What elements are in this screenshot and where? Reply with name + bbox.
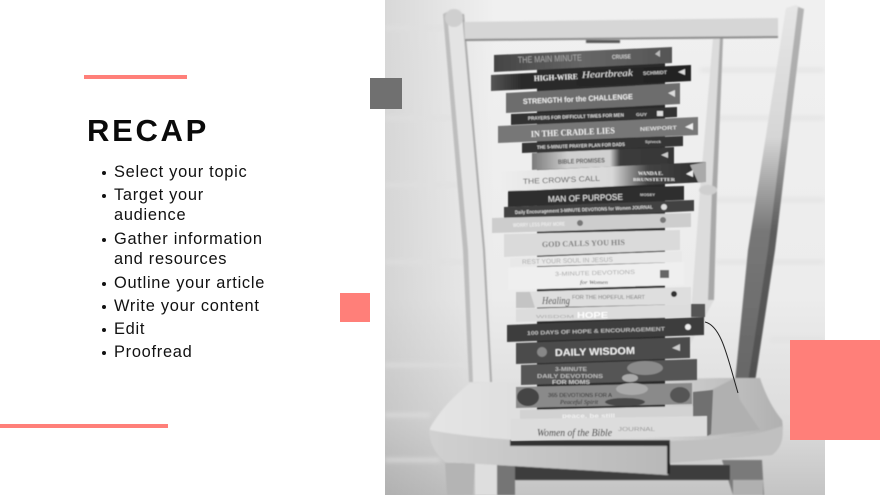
book: Worry Less Pray More: WORRY LESS PRAY MORE	[513, 222, 565, 229]
chair legs	[445, 460, 764, 495]
book: Bible Promises: BIBLE PROMISES	[558, 157, 606, 166]
book: Hope: WISDOM	[536, 314, 574, 319]
book: 3-Minute Devotions for Women: for Women	[580, 279, 608, 286]
small pink square	[340, 293, 370, 322]
book: High-Wire Heartbreak: HIGH-WIRE	[534, 72, 578, 83]
book: Women of the Bible Journal: JOURNAL	[618, 427, 655, 433]
book: The Crow's Call: THE CROW'S CALL	[523, 174, 600, 186]
book: Hope	[516, 304, 705, 322]
book: In the Cradle Lies	[498, 117, 698, 143]
book: Man of Purpose: MOSEY	[640, 192, 655, 197]
book: High-Wire Heartbreak: SCHMIDT	[643, 70, 667, 77]
bullet list	[102, 163, 265, 361]
book: The Main Minute: CRUISE	[612, 54, 631, 61]
book: Daily Wisdom	[516, 337, 690, 364]
book: Worry Less Pray More	[492, 213, 691, 233]
bullet list: and resources	[114, 250, 227, 268]
book: Strength for the Challenge	[506, 83, 680, 113]
book: 3-Minute Devotions for Women	[508, 262, 684, 290]
book: The 5-Minute Prayer Plan for Dads: Spiveck	[645, 139, 662, 144]
book: The 5-Minute Prayer Plan for Dads	[522, 136, 683, 153]
bullet list: Gather information	[114, 230, 263, 248]
book: The Crow's Call	[498, 162, 706, 192]
book: Healing for the Hopeful Heart: Healing	[541, 296, 570, 307]
book: Women of the Bible Journal	[511, 390, 713, 441]
bullet list: Write your content	[114, 297, 260, 315]
book: In the Cradle Lies: NEWPORT	[640, 125, 678, 133]
book: 3-Minute Daily Devotions for Moms: 3-MINUTE	[555, 367, 588, 373]
book: Bible Promises	[532, 147, 674, 170]
book: God Calls You His	[504, 230, 680, 257]
accent bar: bottom	[0, 424, 168, 428]
book: Peace, Be Still: peace, be still	[562, 413, 615, 420]
title: RECAP	[87, 113, 209, 148]
book: God Calls You His: GOD CALLS YOU HIS	[542, 238, 626, 249]
book: Prayers for Difficult Times for Men: GUY	[636, 112, 647, 117]
book: 365 Devotions for a Peaceful Spirit: 365 DEVOTIONS FOR A	[548, 393, 612, 399]
wall	[385, 0, 825, 495]
ribbon bookmark	[705, 322, 738, 393]
book: 100 Days of Hope and Encouragement: 100 DAYS OF HOPE & ENCOURAGEMENT	[527, 327, 666, 337]
grey square	[370, 78, 402, 109]
book: Rest Your Soul in Jesus: REST YOUR SOUL IN JESUS	[522, 257, 614, 266]
photo: stack of books on a white chair	[385, 0, 825, 495]
book: Daily Wisdom: DAILY WISDOM	[555, 346, 635, 359]
chair middle spindle	[690, 38, 723, 345]
book: Hope: HOPE	[577, 310, 608, 320]
book: 100 Days of Hope and Encouragement	[507, 317, 704, 342]
book: The Main Minute: THE MAIN MINUTE	[518, 53, 582, 65]
book: Man of Purpose: MAN OF PURPOSE	[548, 192, 623, 204]
bullet list: Select your topic	[114, 163, 247, 181]
book: Prayers for Difficult Times for Men	[511, 107, 677, 125]
book: Healing for the Hopeful Heart	[516, 287, 691, 308]
book: 365 Devotions for a Peaceful Spirit: Peaceful Spirit	[559, 399, 598, 406]
bullet list: Proofread	[114, 343, 192, 361]
book: 3-Minute Daily Devotions for Moms	[521, 359, 697, 386]
book: Daily Encouragement Journal	[504, 200, 694, 220]
accent bar: top	[84, 75, 187, 79]
book: Rest Your Soul in Jesus	[510, 251, 682, 267]
bullet list: Outline your article	[114, 274, 265, 292]
book: 3-Minute Daily Devotions for Moms: FOR MOMS	[552, 380, 591, 386]
book: Prayers for Difficult Times for Men: PRAYERS FOR DIFFICULT TIMES FOR MEN	[528, 113, 624, 122]
chair	[430, 5, 804, 495]
large pink square	[790, 340, 880, 440]
book: Healing for the Hopeful Heart: FOR THE HOPEFUL HEART	[572, 295, 645, 301]
book: 365 Devotions for a Peaceful Spirit	[516, 383, 692, 408]
book: 3-Minute Daily Devotions for Moms: DAILY DEVOTIONS	[537, 374, 604, 380]
book: High-Wire Heartbreak: Heartbreak	[581, 69, 634, 81]
chair top rail	[464, 18, 778, 43]
chair seat	[430, 378, 783, 475]
book: The Main Minute	[494, 47, 672, 72]
book: Man of Purpose	[508, 186, 684, 207]
book: The Crow's Call: WANDA E.	[638, 172, 664, 177]
book: Peace, Be Still	[520, 406, 694, 423]
book: The 5-Minute Prayer Plan for Dads: THE 5-MINUTE PRAYER PLAN FOR DADS	[537, 142, 626, 151]
bullet list: Edit	[114, 320, 145, 338]
book: 3-Minute Devotions for Women: 3-MINUTE DEVOTIONS	[555, 270, 635, 278]
book: In the Cradle Lies: IN THE CRADLE LIES	[531, 125, 615, 139]
book: The Crow's Call: BRUNSTETTER	[633, 177, 676, 182]
chair right post	[735, 5, 804, 382]
chair left post	[443, 9, 492, 382]
book: Daily Encouragement Journal: Daily Encouragement 3-MINUTE DEVOTIONS for Women JOURNAL	[515, 205, 653, 216]
bullet list: Target your	[114, 186, 204, 204]
book: Strength for the Challenge: STRENGTH for the CHALLENGE	[523, 92, 633, 106]
bullet list: audience	[114, 206, 186, 224]
book stack	[491, 47, 713, 441]
book: Women of the Bible Journal: Women of the Bible	[537, 427, 612, 439]
book: High-Wire Heartbreak	[491, 65, 691, 91]
